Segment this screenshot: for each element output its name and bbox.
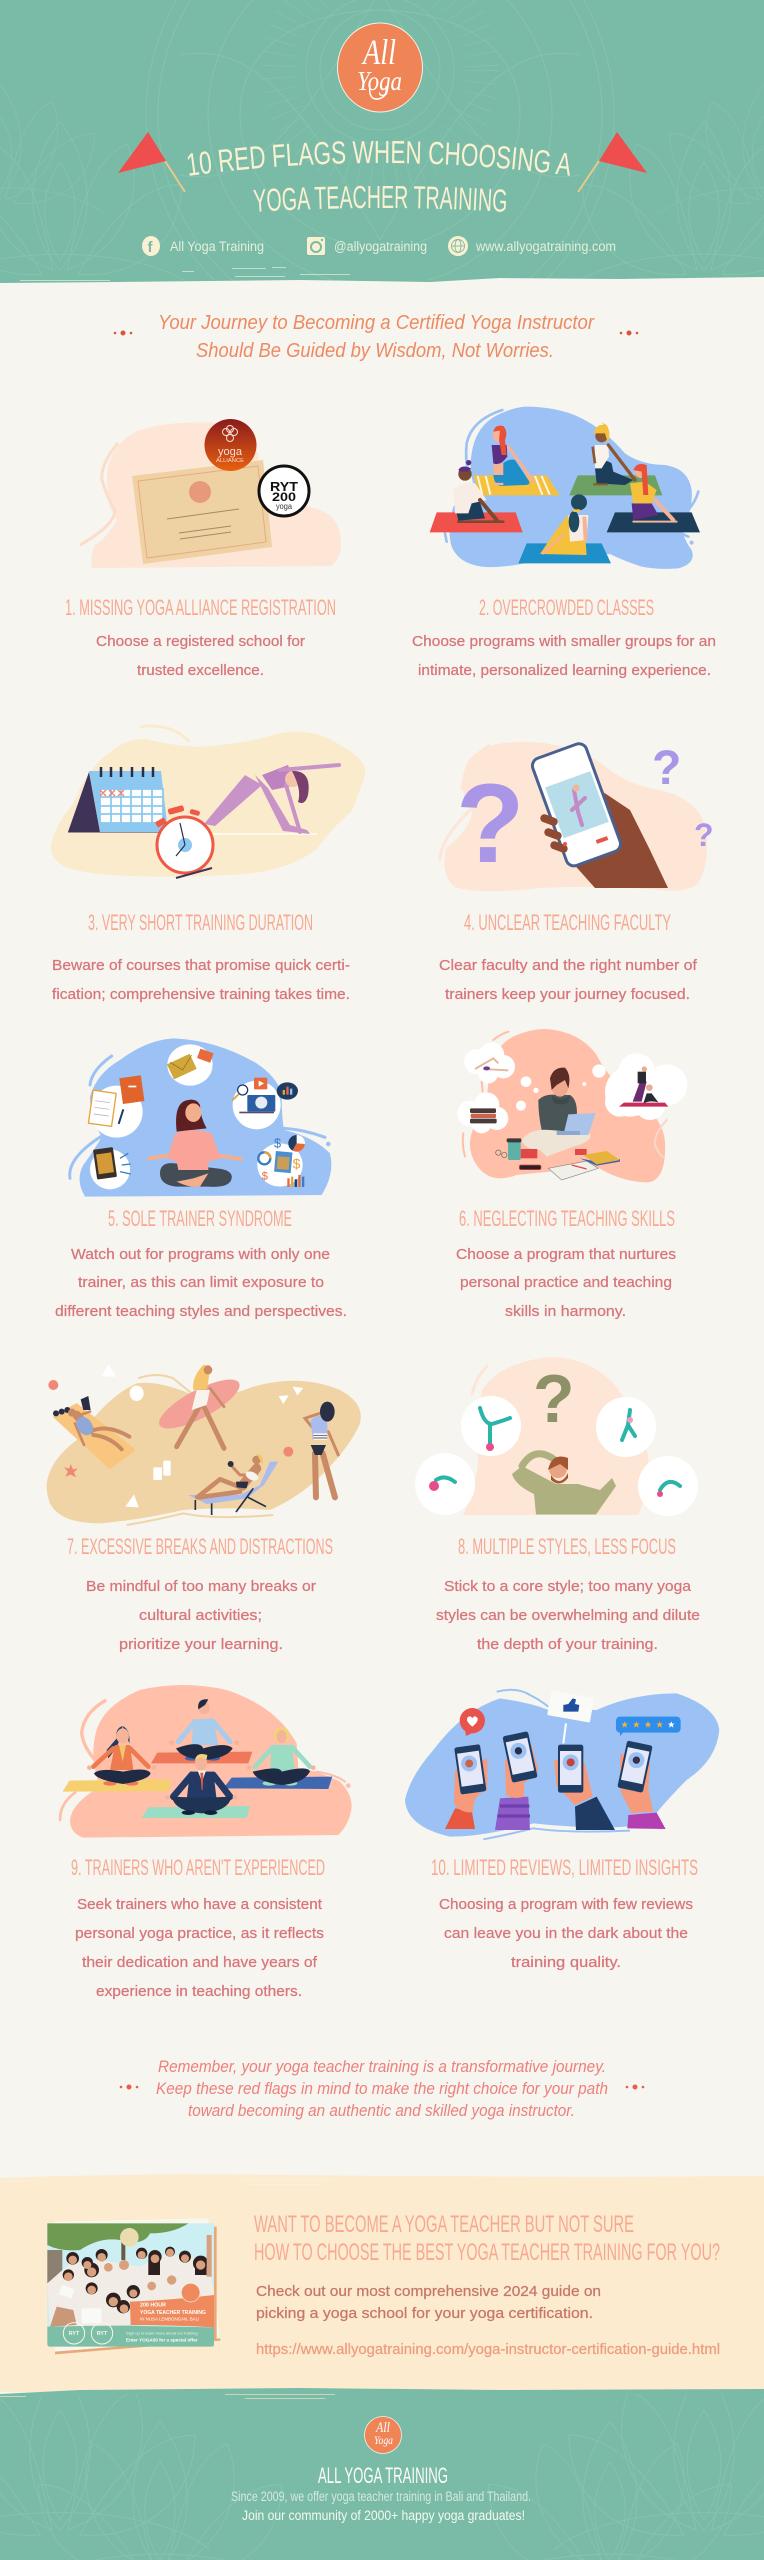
footer text: Join our community of 2000+ happy yoga graduates!: [242, 2508, 525, 2523]
body: [439, 1896, 693, 1971]
panel: 9 trainers who aren't experienced: [60, 1685, 352, 2000]
mandala pattern: [0, 0, 764, 280]
body: their dedication and have years of: [82, 1954, 318, 1971]
icon: left red flag: [118, 132, 185, 192]
body: Be mindful of too many breaks or: [86, 1578, 316, 1595]
body: experience in teaching others.: [96, 1983, 302, 2000]
guide book cover: RYT: [69, 2331, 80, 2337]
body: prioritize your learning.: [119, 1636, 283, 1653]
teacher: navy suit: [165, 1754, 237, 1815]
guide book cover: Enter YOGA50 for a special offer: [126, 2338, 198, 2343]
body: Clear faculty and the right number of: [439, 957, 698, 974]
body: [55, 1246, 347, 1320]
illustration: certificate: RYT: [270, 479, 298, 494]
logo: All: [361, 32, 396, 72]
illustration: meditating woman with work icons: $: [293, 1156, 301, 1172]
body: trusted excellence.: [137, 662, 264, 679]
guide book cover: Sign up to learn more about our training: [126, 2331, 198, 2335]
title: [188, 141, 570, 212]
body: Watch out for programs with only one: [71, 1246, 330, 1263]
body: training quality.: [511, 1954, 621, 1971]
body: personal yoga practice, as it reflects: [75, 1925, 324, 1942]
logo: [338, 23, 422, 112]
subtitle: Should Be Guided by Wisdom, Not Worries.: [196, 340, 554, 362]
student: red hair on navy mat: [630, 464, 677, 522]
left subtitle dots: [114, 330, 132, 336]
body: different teaching styles and perspectives.: [55, 1303, 347, 1320]
illustration: certificate: yoga: [276, 502, 292, 511]
cta body: [256, 2283, 601, 2322]
body: the depth of your training.: [477, 1636, 658, 1653]
illustration: meditating woman with work icons: $: [262, 1170, 269, 1182]
footer brand name: ALL YOGA TRAINING: [318, 2463, 448, 2488]
closing note: [156, 2058, 608, 2120]
illustration: phone and question marks: [440, 742, 714, 891]
body: Choose a registered school for: [96, 633, 305, 650]
left closing dots: [120, 2084, 138, 2090]
title: YOGA TEACHER TRAINING: [253, 186, 506, 212]
panel: 7 excessive breaks and distractions: [47, 1364, 361, 1653]
student: back view on blue mat: [540, 494, 588, 555]
cta body: picking a yoga school for your yoga certification.: [256, 2305, 593, 2322]
panel: header: [0, 0, 764, 283]
illustration: beach scene: [47, 1364, 361, 1525]
illustration: phone and question marks: ?: [456, 761, 524, 886]
body: cultural activities;: [139, 1607, 262, 1624]
closing note: toward becoming an authentic and skilled yoga instructor.: [188, 2102, 575, 2120]
illustration: meditating woman with work icons: [70, 1038, 331, 1197]
body: Stick to a core style; too many yoga: [444, 1578, 692, 1595]
footer logo: Yoga: [374, 2433, 393, 2447]
heading: 5. SOLE TRAINER SYNDROME: [108, 1206, 292, 1231]
guide book cover: YOGA TEACHER TRAINING: [140, 2310, 207, 2316]
panel: 4 unclear teaching faculty: [439, 742, 714, 1003]
panel: 1 missing yoga alliance registration: [65, 419, 341, 679]
panel: 3 very short training duration: [51, 726, 365, 1003]
guide book cover: 200 HOUR: [140, 2303, 166, 2309]
body: trainer, as this can limit exposure to: [78, 1274, 324, 1291]
illustration: phones with reviews: [405, 1690, 719, 1839]
body: Choose a program that nurtures: [456, 1246, 676, 1263]
guide book cover: IN NUSA LEMBONGAN, BALI: [140, 2317, 199, 2322]
teacher: mint shirt: [247, 1727, 316, 1786]
illustration: meditating woman with work icons: $: [274, 1136, 281, 1150]
body: [86, 1578, 316, 1653]
panel: guide call to action: [0, 2174, 764, 2392]
panel: 8 multiple styles, less focus: [415, 1357, 700, 1653]
panel: 10 limited reviews, limited insights: [405, 1690, 719, 1971]
body: [96, 633, 305, 679]
illustration: certificate: 200: [272, 490, 296, 504]
illustration: phone and question marks: ?: [652, 742, 681, 795]
body: [75, 1896, 324, 2000]
subtitle: Your Journey to Becoming a Certified Yoga Instructor: [158, 312, 595, 334]
teacher: blue shirt: [169, 1699, 239, 1761]
body: [52, 957, 350, 1003]
right closing dots: [626, 2084, 644, 2090]
footer logo: [364, 2416, 402, 2454]
student: purple bun on red mat: [453, 460, 503, 522]
body: Choosing a program with few reviews: [439, 1896, 693, 1913]
icon: facebook: [142, 236, 160, 256]
instagram label: @allyogatraining: [334, 239, 427, 254]
footer logo: All: [375, 2420, 390, 2436]
footer text: [231, 2489, 531, 2523]
panel: 2 overcrowded classes: [412, 407, 716, 679]
panel: 5 sole trainer syndrome: [55, 1038, 347, 1320]
body: Beware of courses that promise quick certi-: [52, 957, 350, 974]
title: 10 RED FLAGS WHEN CHOOSING A: [188, 141, 570, 176]
heading: 9. TRAINERS WHO AREN'T EXPERIENCED: [71, 1855, 325, 1880]
illustration: confused man with yoga styles: ?: [533, 1361, 575, 1437]
body: [412, 633, 716, 679]
body: Seek trainers who have a consistent: [77, 1896, 323, 1913]
facebook label: All Yoga Training: [170, 239, 264, 254]
illustration: yoga mats and students: [430, 407, 700, 569]
body: personal practice and teaching: [460, 1274, 672, 1291]
lotus pattern: [0, 2394, 764, 2560]
footer text: Since 2009, we offer yoga teacher training in Bali and Thailand.: [231, 2489, 531, 2504]
cta heading: [254, 2211, 720, 2266]
panel: footer: [0, 2388, 764, 2560]
icon: right red flag: [578, 132, 647, 192]
icon: globe: [448, 236, 468, 256]
body: skills in harmony.: [505, 1303, 626, 1320]
body: [456, 1246, 676, 1320]
cta body: Check out our most comprehensive 2024 guide on: [256, 2283, 601, 2300]
body: Choose programs with smaller groups for an: [412, 633, 716, 650]
closing note: Keep these red flags in mind to make the right choice for your path: [156, 2080, 608, 2098]
body: can leave you in the dark about the: [444, 1925, 688, 1942]
brush edge: [0, 267, 764, 290]
body: [439, 957, 698, 1003]
illustration: meditating group: [60, 1685, 352, 1838]
closing note: Remember, your yoga teacher training is a transformative journey.: [158, 2058, 606, 2076]
student: red hair on yellow mat: [492, 426, 533, 486]
illustration: certificate: [80, 419, 341, 568]
panel: 6 neglecting teaching skills: [456, 1029, 687, 1320]
student: yellow hair on green mat: [593, 423, 635, 485]
website label: www.allyogatraining.com: [475, 239, 616, 254]
body: intimate, personalized learning experience.: [418, 662, 711, 679]
illustration: phone and question marks: ?: [694, 817, 714, 853]
body: fication; comprehensive training takes time.: [52, 986, 350, 1003]
guide book cover: RYT: [97, 2331, 108, 2337]
right subtitle dots: [620, 330, 638, 336]
guide url: https://www.allyogatraining.com/yoga-instructor-certification-guide.html: [256, 2341, 720, 2358]
icon: instagram: [307, 237, 325, 255]
teacher: orange jacket: [87, 1726, 156, 1786]
illustration: student with thought clouds: [457, 1029, 687, 1182]
illustration: certificate: ALLIANCE: [216, 458, 245, 464]
illustration: confused man with yoga styles: [415, 1357, 698, 1516]
body: [436, 1578, 700, 1653]
body: trainers keep your journey focused.: [445, 986, 690, 1003]
icon: facebook: f: [148, 239, 154, 256]
body: styles can be overwhelming and dilute: [436, 1607, 700, 1624]
heading: 7. EXCESSIVE BREAKS AND DISTRACTIONS: [67, 1534, 333, 1559]
subtitle: [158, 312, 595, 362]
illustration: calendar, clock and pose: [51, 726, 365, 878]
heading: 1. MISSING YOGA ALLIANCE REGISTRATION: [65, 595, 336, 620]
social links: [142, 236, 616, 256]
illustration: certificate: yoga: [218, 446, 243, 458]
guide book cover: [47, 2218, 221, 2354]
heading: 3. VERY SHORT TRAINING DURATION: [88, 910, 313, 935]
logo: Yoga: [357, 66, 402, 96]
